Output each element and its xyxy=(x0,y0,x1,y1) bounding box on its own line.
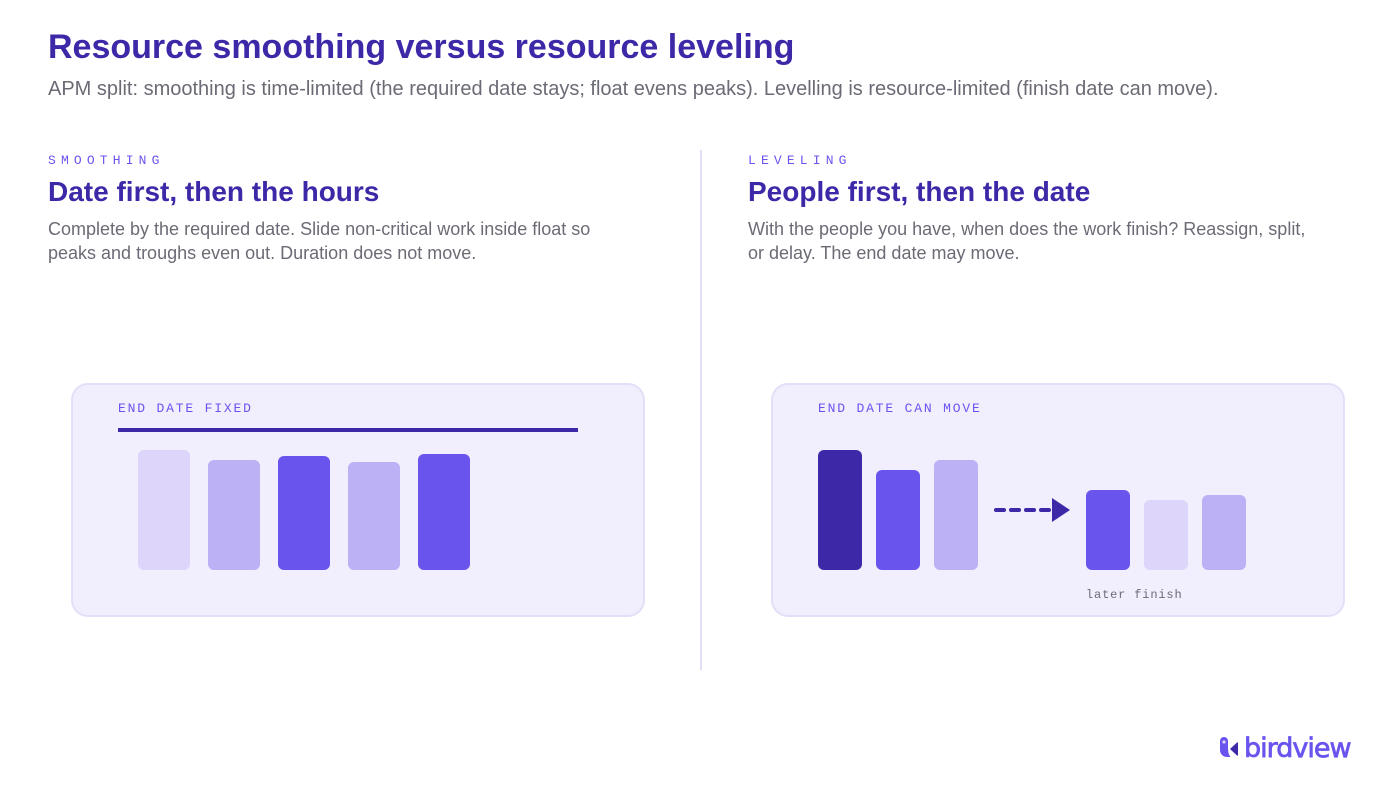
leveling description: With the people you have, when does the work finish? Reassign, split, xyxy=(748,219,1305,239)
leveling description: or delay. The end date may move. xyxy=(748,243,1020,263)
smoothing eyebrow: SMOOTHING xyxy=(48,153,165,168)
panel: smoothing chart xyxy=(71,383,645,617)
logo wordmark: birdview xyxy=(1244,733,1351,764)
bars after the delay xyxy=(1086,490,1246,570)
panel: smoothing text xyxy=(48,153,590,263)
leveling description xyxy=(748,219,1305,263)
leveling eyebrow: LEVELING xyxy=(748,153,852,168)
panel: leveling chart xyxy=(771,383,1345,617)
smoothing description: peaks and troughs even out. Duration does not move. xyxy=(48,243,476,263)
icon: birdview logo mark xyxy=(1220,737,1238,757)
smoothing description: Complete by the required date. Slide non-critical work inside float so xyxy=(48,219,590,239)
bars before the delay xyxy=(818,450,978,570)
title: Resource smoothing versus resource leveling xyxy=(48,28,794,66)
label: end date fixed: END DATE FIXED xyxy=(118,401,253,416)
smoothing heading: Date first, then the hours xyxy=(48,176,379,207)
smoothing bars xyxy=(138,450,470,570)
label: later finish: later finish xyxy=(1086,588,1182,602)
label: end date can move: END DATE CAN MOVE xyxy=(818,401,982,416)
leveling heading: People first, then the date xyxy=(748,176,1090,207)
smoothing description xyxy=(48,219,590,263)
subtitle: APM split: smoothing is time-limited (the required date stays; float evens peaks). Levelling is resource-limited (finish date can move). xyxy=(48,78,1218,100)
panel: leveling text xyxy=(748,153,1305,263)
fixed end date line xyxy=(118,428,578,432)
birdview logo xyxy=(1220,733,1353,765)
arrow: dashed delay xyxy=(996,498,1070,522)
